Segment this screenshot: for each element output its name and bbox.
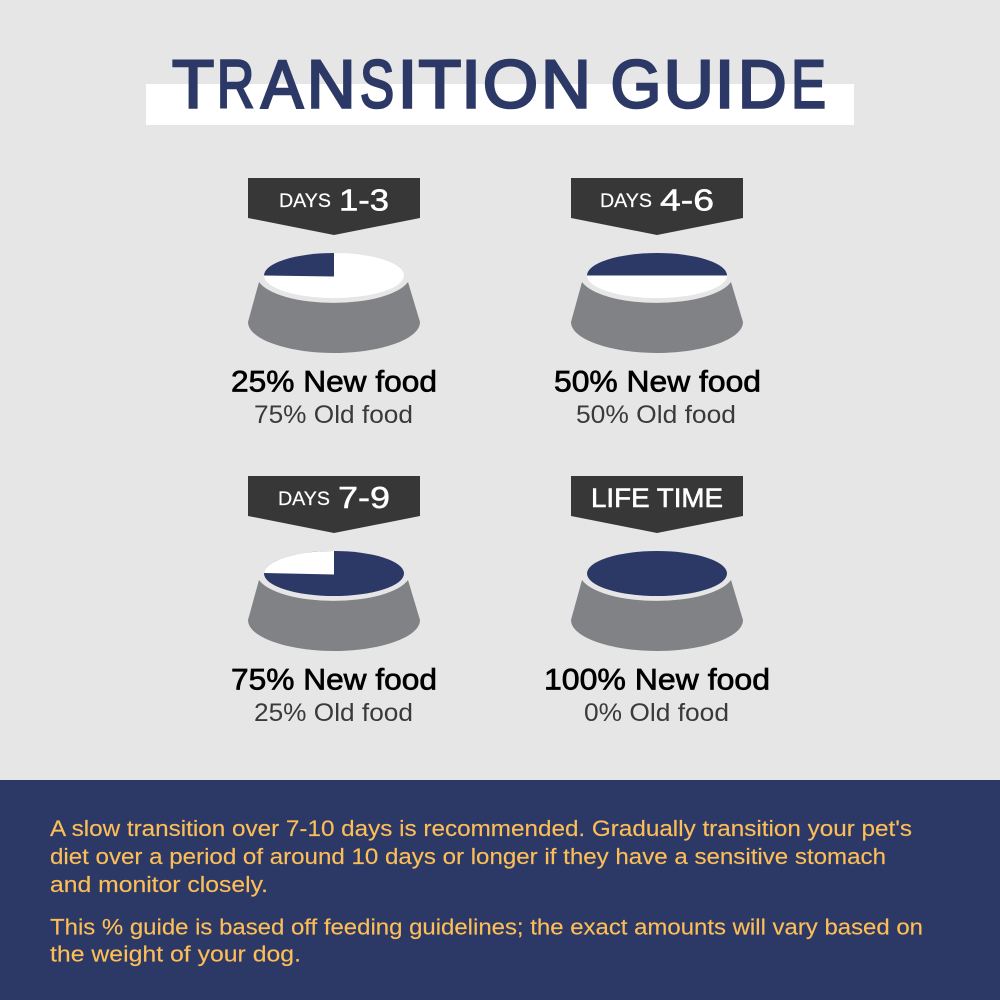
text block: slow transition advice: A slow transition over 7-10 days is recommended. Gradually transition your pet's [50,816,912,841]
title: T [172,47,214,123]
label: 25% old food: 25% Old food [254,699,413,727]
title: N [541,47,591,123]
badge: days 1-3: DAYS [279,190,331,212]
title: R [217,47,254,123]
icon: bowl 50 percent new food [571,253,743,353]
label: 25% new food: 25% New food [231,366,437,398]
title: T [418,47,461,123]
title: I [398,47,417,123]
label: 50% new food: 50% New food [554,366,761,398]
panel: days 1-3 [231,178,437,429]
label: 100% new food: 100% New food [544,664,770,696]
badge: days 7-9: DAYS [278,488,330,510]
label: 75% new food: 75% New food [231,664,437,696]
label: 50% old food: 50% Old food [576,401,736,429]
badge: life time [571,476,743,533]
badge: days 4-6: 4-6 [660,182,714,218]
text block: slow transition advice: diet over a period of around 10 days or longer if they have a sensitive stomach [50,844,886,869]
panel: life time [544,476,770,727]
title: U [664,47,714,123]
title: A [261,47,304,123]
title: I [715,47,734,123]
icon: bowl 25 percent new food [248,253,420,353]
title [146,47,854,125]
title: G [611,47,661,123]
title: I [461,47,481,123]
text block: guide disclaimer: This % guide is based off feeding guidelines; the exact amounts will vary based on [50,914,923,940]
label: 75% old food: 75% Old food [254,401,413,429]
panel: footer note [0,780,1000,1000]
text block: guide disclaimer: the weight of your dog. [50,942,301,966]
text block: slow transition advice [50,816,912,897]
title: O [483,47,538,123]
badge: days 4-6: DAYS [600,190,652,212]
title: D [738,47,787,123]
badge: life time: LIFE TIME [591,483,723,513]
label: 0% old food: 0% Old food [584,699,729,727]
badge: days 4-6 [571,178,743,235]
badge: days 1-3: 1-3 [339,182,389,218]
text block: slow transition advice: and monitor closely. [50,872,268,897]
icon: bowl 100 percent new food [571,551,743,651]
text block: guide disclaimer [50,914,923,966]
title: E [791,47,826,123]
panel: days 4-6 [554,178,761,429]
badge: days 1-3 [248,178,420,235]
title: N [307,47,356,123]
badge: days 7-9 [248,476,420,533]
badge: days 7-9: 7-9 [338,480,390,515]
icon: bowl 75 percent new food [248,551,420,651]
title: S [360,47,394,123]
panel: days 7-9 [231,476,437,727]
